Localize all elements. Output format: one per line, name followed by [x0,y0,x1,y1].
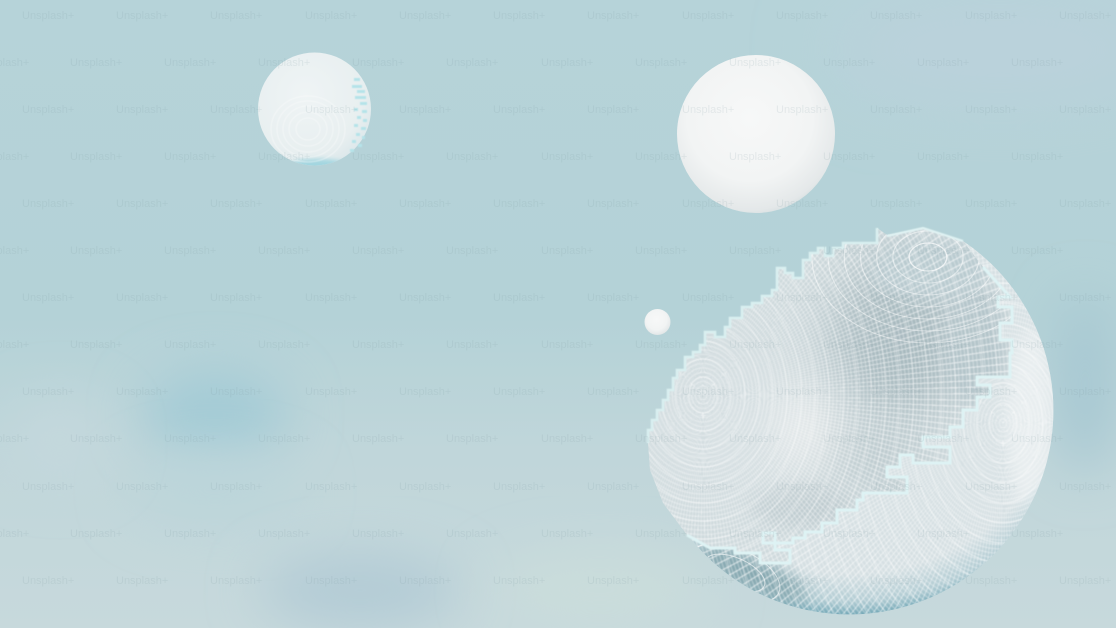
stock photo watermark grid: Unsplash+ [635,151,687,163]
stock photo watermark grid: Unsplash+ [965,198,1017,210]
stock photo watermark grid: Unsplash+ [210,10,262,22]
stock photo watermark grid: Unsplash+ [305,292,357,304]
stock photo watermark grid: Unsplash+ [493,198,545,210]
stock photo watermark grid: Unsplash+ [729,245,781,257]
stock photo watermark grid: Unsplash+ [541,528,593,540]
stock photo watermark grid: Unsplash+ [352,151,404,163]
stock photo watermark grid: Unsplash+ [776,104,828,116]
stock photo watermark grid: Unsplash+ [541,245,593,257]
stock photo watermark grid: Unsplash+ [258,528,310,540]
stock photo watermark grid: Unsplash+ [258,151,310,163]
stock photo watermark grid: Unsplash+ [917,57,969,69]
stock photo watermark grid: Unsplash+ [635,433,687,445]
stock photo watermark grid: Unsplash+ [965,10,1017,22]
stock photo watermark grid: Unsplash+ [258,433,310,445]
stock photo watermark grid: Unsplash+ [1059,104,1111,116]
stock photo watermark grid: Unsplash+ [823,528,875,540]
stock photo watermark grid: Unsplash+ [917,528,969,540]
stock photo watermark grid: Unsplash+ [305,104,357,116]
bright front rim [687,267,1012,563]
large white sphere [677,55,835,213]
stock photo watermark grid: Unsplash+ [1011,151,1063,163]
stock photo watermark grid: Unsplash+ [446,245,498,257]
sphere body [258,52,371,166]
stock photo watermark grid: Unsplash+ [823,151,875,163]
stock photo watermark grid: Unsplash+ [116,10,168,22]
stock photo watermark grid: Unsplash+ [352,528,404,540]
stock photo watermark grid: Unsplash+ [399,575,451,587]
stock photo watermark grid: Unsplash+ [682,292,734,304]
stock photo watermark grid: Unsplash+ [870,386,922,398]
stock photo watermark grid: Unsplash+ [682,575,734,587]
stock photo watermark grid: Unsplash+ [635,339,687,351]
small white sphere [644,309,670,335]
stock photo watermark grid: Unsplash+ [210,292,262,304]
stock photo watermark grid: Unsplash+ [776,481,828,493]
stock photo watermark grid: Unsplash+ [965,104,1017,116]
stock photo watermark grid: Unsplash+ [823,339,875,351]
stock photo watermark grid: Unsplash+ [917,245,969,257]
stock photo watermark grid: Unsplash+ [776,575,828,587]
teal shading at the bottom [292,156,340,166]
stock photo watermark grid: Unsplash+ [446,433,498,445]
stock photo watermark grid: Unsplash+ [870,198,922,210]
stock photo watermark grid: Unsplash+ [917,433,969,445]
stock photo watermark grid: Unsplash+ [22,292,74,304]
stock photo watermark grid: Unsplash+ [541,151,593,163]
stock photo watermark grid: Unsplash+ [164,245,216,257]
stock photo watermark grid: Unsplash+ [493,10,545,22]
stock photo watermark grid: Unsplash+ [541,433,593,445]
stock photo watermark grid: Unsplash+ [776,198,828,210]
stock photo watermark grid: Unsplash+ [305,386,357,398]
stock photo watermark grid: Unsplash+ [776,10,828,22]
stock photo watermark grid: Unsplash+ [22,198,74,210]
stock photo watermark grid: Unsplash+ [22,386,74,398]
stock photo watermark grid: Unsplash+ [493,481,545,493]
stock photo watermark grid: Unsplash+ [116,575,168,587]
stock photo watermark grid: Unsplash+ [587,575,639,587]
interior mesh [648,230,1011,562]
stock photo watermark grid: Unsplash+ [635,528,687,540]
stock photo watermark grid: Unsplash+ [682,104,734,116]
stock photo watermark grid: Unsplash+ [729,151,781,163]
stock photo watermark grid: Unsplash+ [587,10,639,22]
bottom pole rings [698,545,780,600]
stock photo watermark grid: Unsplash+ [164,528,216,540]
stock photo watermark grid: Unsplash+ [210,198,262,210]
stock photo watermark grid: Unsplash+ [729,339,781,351]
stock photo watermark grid: Unsplash+ [164,339,216,351]
stock photo watermark grid: Unsplash+ [446,57,498,69]
stock photo watermark grid: Unsplash+ [870,292,922,304]
front shell [692,230,1054,614]
stock photo watermark grid: Unsplash+ [965,292,1017,304]
stock photo watermark grid: Unsplash+ [682,10,734,22]
stock photo watermark grid: Unsplash+ [116,104,168,116]
stock photo watermark grid: Unsplash+ [1059,198,1111,210]
top pole rings [812,230,1010,344]
stock photo watermark grid: Unsplash+ [210,104,262,116]
stock photo watermark grid: Unsplash+ [965,575,1017,587]
stock photo watermark grid: Unsplash+ [587,198,639,210]
stock photo watermark grid: Unsplash+ [1011,528,1063,540]
stock photo watermark grid: Unsplash+ [493,292,545,304]
stock photo watermark grid: Unsplash+ [164,57,216,69]
stock photo watermark grid: Unsplash+ [823,433,875,445]
stock photo watermark grid: Unsplash+ [305,575,357,587]
top-left sphere with fragmenting right edge [258,52,371,171]
stock photo watermark grid: Unsplash+ [1059,575,1111,587]
stock photo watermark grid: Unsplash+ [446,339,498,351]
stock photo watermark grid: Unsplash+ [1059,10,1111,22]
stock photo watermark grid: Unsplash+ [493,386,545,398]
stock photo watermark grid: Unsplash+ [399,292,451,304]
stock photo watermark grid: Unsplash+ [541,57,593,69]
stock photo watermark grid: Unsplash+ [258,339,310,351]
stock photo watermark grid: Unsplash+ [22,104,74,116]
stock photo watermark grid: Unsplash+ [210,575,262,587]
stock photo watermark grid: Unsplash+ [258,245,310,257]
stock photo watermark grid: Unsplash+ [352,57,404,69]
bright top rim pieces [887,228,963,241]
stock photo watermark grid: Unsplash+ [965,386,1017,398]
stock photo watermark grid: Unsplash+ [587,292,639,304]
stock photo watermark grid: Unsplash+ [1011,339,1063,351]
stock photo watermark grid: Unsplash+ [446,528,498,540]
stock photo watermark grid: Unsplash+ [917,151,969,163]
stock photo watermark grid: Unsplash+ [776,386,828,398]
stock photo watermark grid: Unsplash+ [776,292,828,304]
stock photo watermark grid: Unsplash+ [22,575,74,587]
concentric rings [292,155,330,163]
stock photo watermark grid: Unsplash+ [305,10,357,22]
large broken mesh hemisphere [646,226,1054,614]
stock photo watermark grid: Unsplash+ [965,481,1017,493]
stock photo watermark grid: Unsplash+ [587,481,639,493]
stock photo watermark grid: Unsplash+ [399,198,451,210]
stock photo watermark grid: Unsplash+ [258,57,310,69]
stock photo watermark grid: Unsplash+ [399,104,451,116]
dark lower mesh band [698,544,812,603]
stock photo watermark grid: Unsplash+ [352,339,404,351]
stock photo watermark grid: Unsplash+ [1011,433,1063,445]
stock photo watermark grid: Unsplash+ [116,198,168,210]
stock photo watermark grid: Unsplash+ [164,151,216,163]
stock photo watermark grid: Unsplash+ [587,386,639,398]
stock photo watermark grid: Unsplash+ [729,433,781,445]
stock photo watermark grid: Unsplash+ [352,245,404,257]
bright upper rim [648,228,877,443]
stock photo watermark grid: Unsplash+ [116,292,168,304]
stock photo watermark grid: Unsplash+ [116,481,168,493]
stock photo watermark grid: Unsplash+ [493,575,545,587]
fragmented mesh pieces [350,78,367,152]
stock photo watermark grid: Unsplash+ [682,386,734,398]
stock photo watermark grid: Unsplash+ [729,528,781,540]
stock photo watermark grid: Unsplash+ [399,481,451,493]
stock photo watermark grid: Unsplash+ [70,151,122,163]
stock photo watermark grid: Unsplash+ [493,104,545,116]
stock photo watermark grid: Unsplash+ [1059,292,1111,304]
stock photo watermark grid: Unsplash+ [70,528,122,540]
stock photo watermark grid: Unsplash+ [70,57,122,69]
stock photo watermark grid: Unsplash+ [1059,386,1111,398]
stock photo watermark grid: Unsplash+ [305,481,357,493]
stock photo watermark grid: Unsplash+ [305,198,357,210]
stock photo watermark grid: Unsplash+ [541,339,593,351]
stock photo watermark grid: Unsplash+ [22,481,74,493]
stock photo watermark grid: Unsplash+ [399,10,451,22]
stock photo watermark grid: Unsplash+ [682,481,734,493]
stock photo watermark grid: Unsplash+ [116,386,168,398]
stock photo watermark grid: Unsplash+ [210,481,262,493]
stock photo watermark grid: Unsplash+ [823,245,875,257]
stock photo watermark grid: Unsplash+ [70,245,122,257]
stock photo watermark grid: Unsplash+ [70,339,122,351]
stock photo watermark grid: Unsplash+ [1011,245,1063,257]
front shell mesh [692,244,1053,614]
stock photo watermark grid: Unsplash+ [587,104,639,116]
stock photo watermark grid: Unsplash+ [635,245,687,257]
stock photo watermark grid: Unsplash+ [210,386,262,398]
stock photo watermark grid: Unsplash+ [729,57,781,69]
stock photo watermark grid: Unsplash+ [164,433,216,445]
stock photo watermark grid: Unsplash+ [1059,481,1111,493]
stock photo watermark grid: Unsplash+ [917,339,969,351]
interior of the hemisphere [648,229,1011,562]
stock photo watermark grid: Unsplash+ [1011,57,1063,69]
stock photo watermark grid: Unsplash+ [399,386,451,398]
stock photo watermark grid: Unsplash+ [682,198,734,210]
stock photo watermark grid: Unsplash+ [870,575,922,587]
stock photo watermark grid: Unsplash+ [635,57,687,69]
stock photo watermark grid: Unsplash+ [352,433,404,445]
stock photo watermark grid: Unsplash+ [70,433,122,445]
stock photo watermark grid: Unsplash+ [446,151,498,163]
stock photo watermark grid: Unsplash+ [870,104,922,116]
stock photo watermark grid: Unsplash+ [823,57,875,69]
stock photo watermark grid: Unsplash+ [22,10,74,22]
stock photo watermark grid: Unsplash+ [870,10,922,22]
stock photo watermark grid: Unsplash+ [870,481,922,493]
